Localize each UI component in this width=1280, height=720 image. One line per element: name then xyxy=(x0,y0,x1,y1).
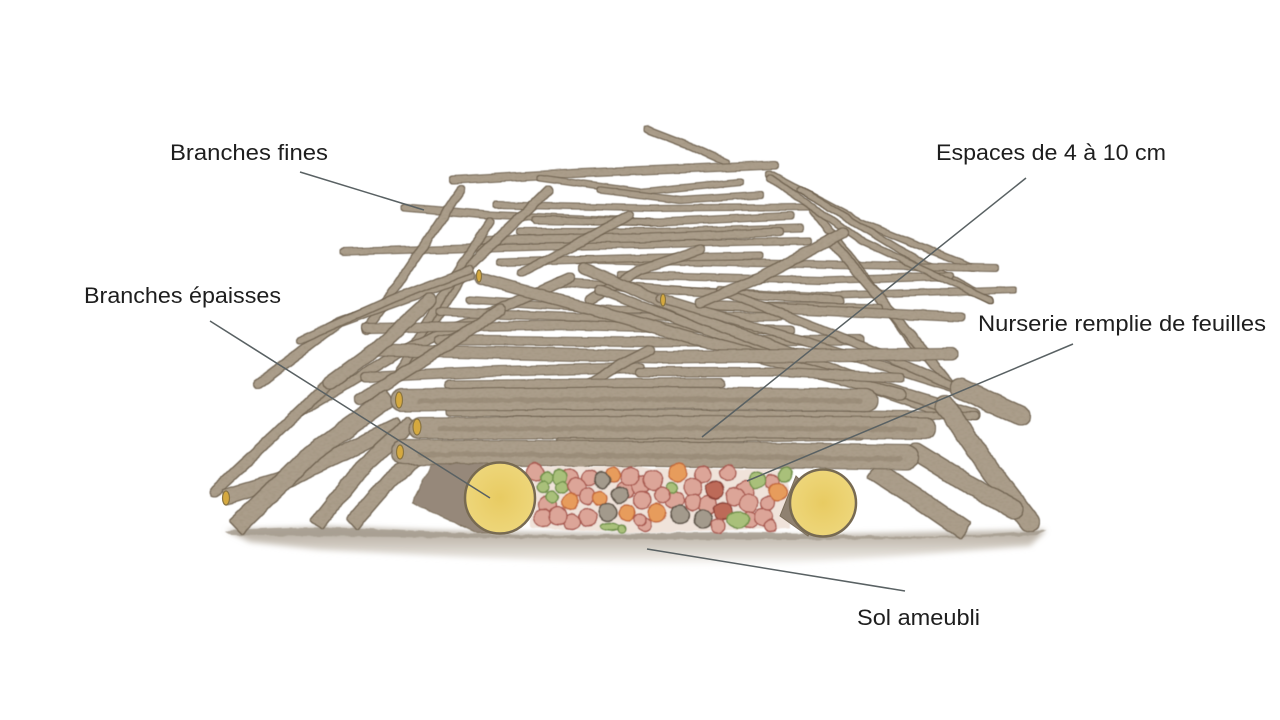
thick branches: right side xyxy=(874,388,1030,531)
ground: loosened soil xyxy=(225,527,1046,566)
large log left xyxy=(412,462,535,534)
leader: nurserie xyxy=(747,344,1073,481)
large log right xyxy=(780,470,856,536)
leader: branches fines xyxy=(300,172,424,210)
cut branch ends xyxy=(222,270,666,505)
label: sol ameubli: Sol ameubli xyxy=(857,605,980,630)
label: espaces: Espaces de 4 à 10 cm xyxy=(936,140,1166,165)
nursery filled with leaves xyxy=(526,463,792,533)
thick horizontal logs xyxy=(402,398,924,459)
thin branches: back layer xyxy=(258,129,1014,440)
label: branches épaisses: Branches épaisses xyxy=(84,283,281,308)
leader: branches épaisses xyxy=(210,321,490,498)
label: nurserie: Nurserie remplie de feuilles xyxy=(978,311,1266,336)
leader: espaces xyxy=(702,178,1026,437)
branch pile xyxy=(215,129,1030,531)
thick branches: left side xyxy=(215,300,500,527)
label: branches fines: Branches fines xyxy=(170,140,328,165)
leader: sol ameubli xyxy=(647,549,905,591)
